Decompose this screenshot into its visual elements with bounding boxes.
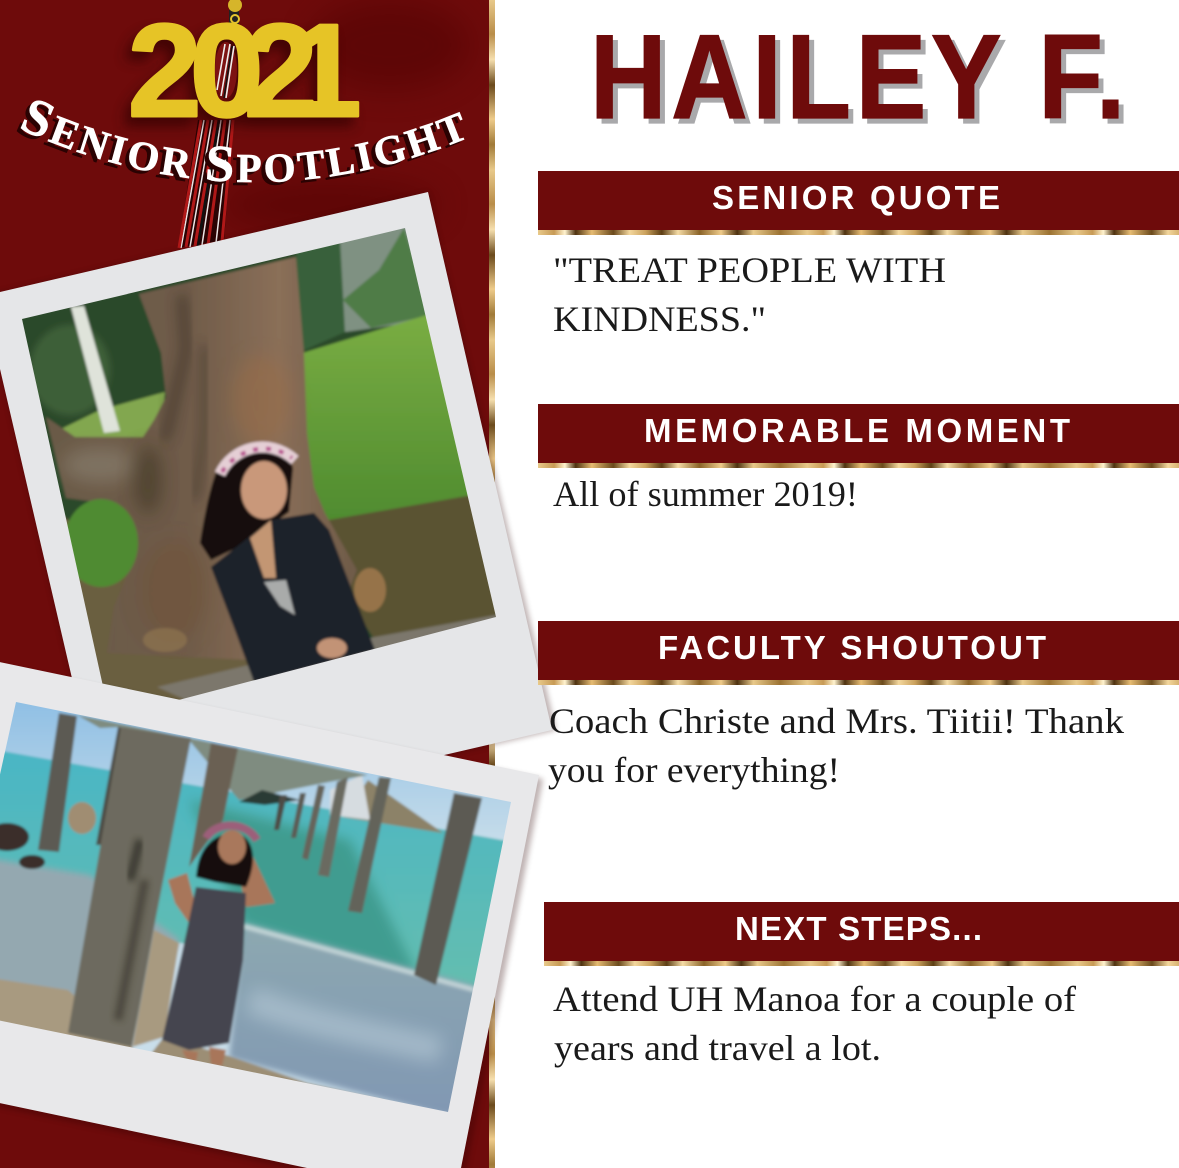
- panel: polaroid photo under tree: [0, 192, 558, 756]
- panel: maroon background: [0, 0, 490, 1168]
- panel: polaroid photo under pier: [0, 660, 543, 1168]
- heading: student name: HAILEY F.: [595, 15, 1130, 148]
- panel: memorable moment: [538, 404, 1179, 514]
- panel: memorable moment: MEMORABLE MOMENT: [644, 412, 1070, 449]
- photo: graduate by a tree: [22, 228, 496, 700]
- panel: next steps: [544, 902, 1179, 1068]
- panel: faculty shoutout: FACULTY SHOUTOUT: [658, 629, 1046, 666]
- panel: senior quote: SENIOR QUOTE: [712, 179, 1000, 216]
- figure: woman in patterned dress: [162, 826, 275, 1066]
- icon: graduation tassel: [178, 0, 242, 248]
- figure: graduate in black gown: [200, 447, 375, 682]
- panel: next steps: NEXT STEPS...: [735, 910, 982, 947]
- panel: faculty shoutout: you for everything!: [548, 750, 840, 790]
- panel: faculty shoutout: [538, 621, 1179, 790]
- heading: Senior Spotlight curved title: SENIOR SPOTLIGHT: [16, 104, 460, 186]
- panel: faculty shoutout: Coach Christe and Mrs. Tiitii! Thank: [549, 701, 1124, 741]
- panel: next steps: years and travel a lot.: [554, 1028, 881, 1068]
- heading: 2021 gold ornament: 2021: [122, 6, 355, 153]
- panel: senior quote: [538, 171, 1179, 339]
- gold vertical divider: [489, 0, 495, 1168]
- panel: next steps: Attend UH Manoa for a couple of: [553, 979, 1076, 1019]
- panel: memorable moment: All of summer 2019!: [553, 474, 858, 514]
- heading: student name: HAILEY F.: [590, 10, 1125, 144]
- pier pillars: [38, 713, 482, 1047]
- panel: senior quote: "TREAT PEOPLE WITH: [553, 250, 946, 290]
- panel: senior quote: KINDNESS.": [553, 299, 766, 339]
- heading: Senior Spotlight curved title: SENIOR SPOTLIGHT: [20, 100, 464, 182]
- photo: woman at the beach beneath pier: [0, 690, 530, 1120]
- heading: 2021 gold ornament: 2021: [128, 0, 361, 144]
